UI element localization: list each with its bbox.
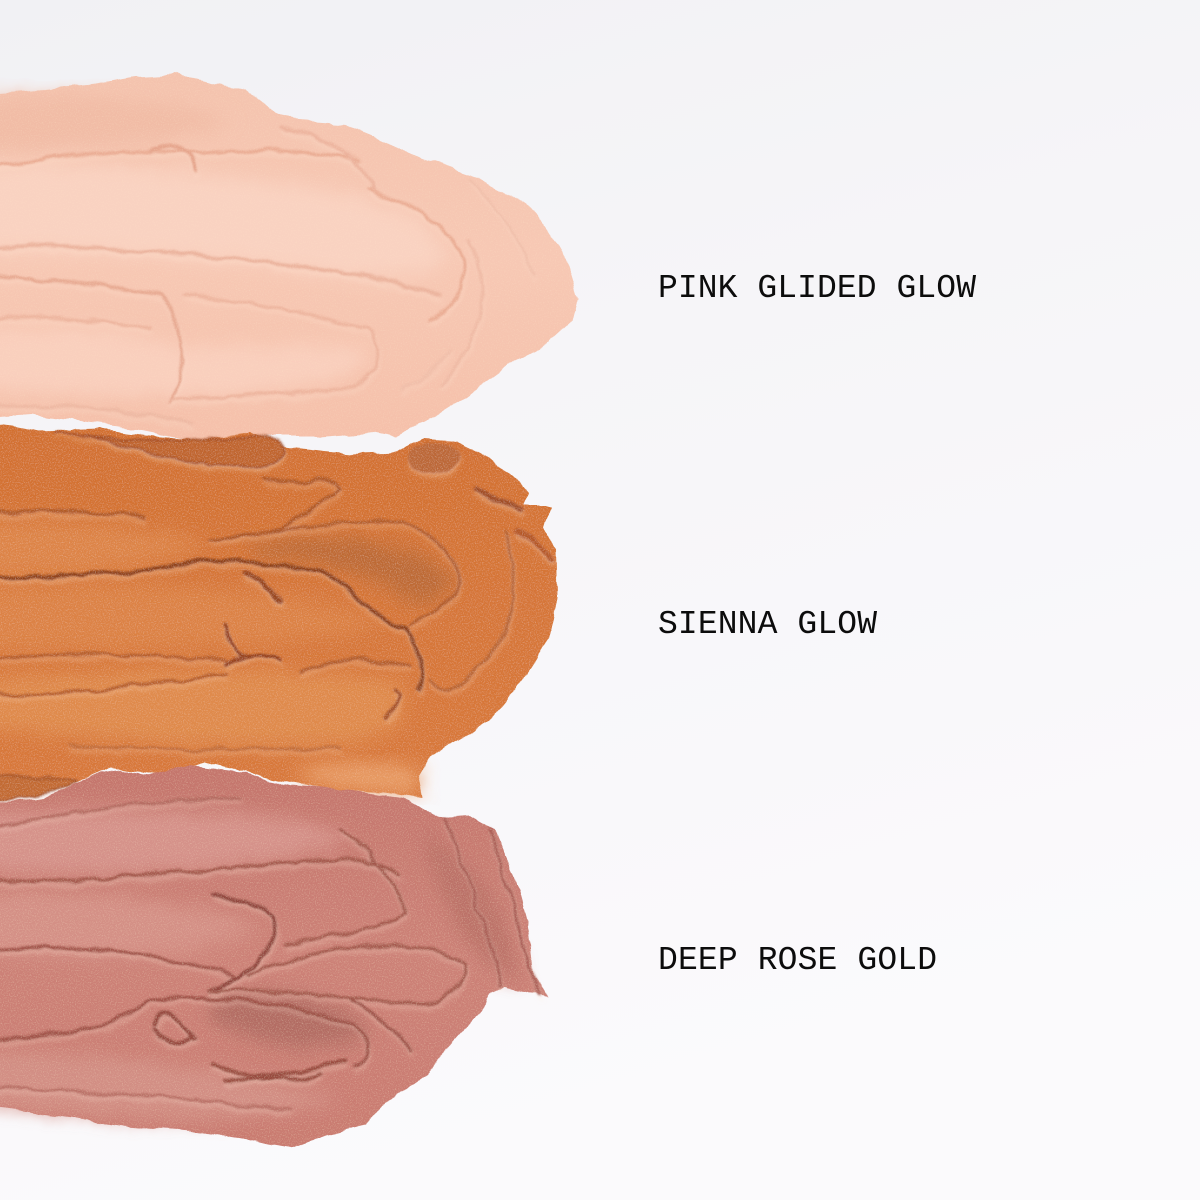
label: pink glided glow: PINK GLIDED GLOW xyxy=(658,270,976,307)
label: deep rose gold: DEEP ROSE GOLD xyxy=(658,942,937,979)
label: sienna glow: SIENNA GLOW xyxy=(658,606,877,643)
swatch: pink glided glow xyxy=(0,75,578,440)
swatch: deep rose gold xyxy=(0,765,548,1148)
swatch: sienna glow xyxy=(0,422,558,806)
